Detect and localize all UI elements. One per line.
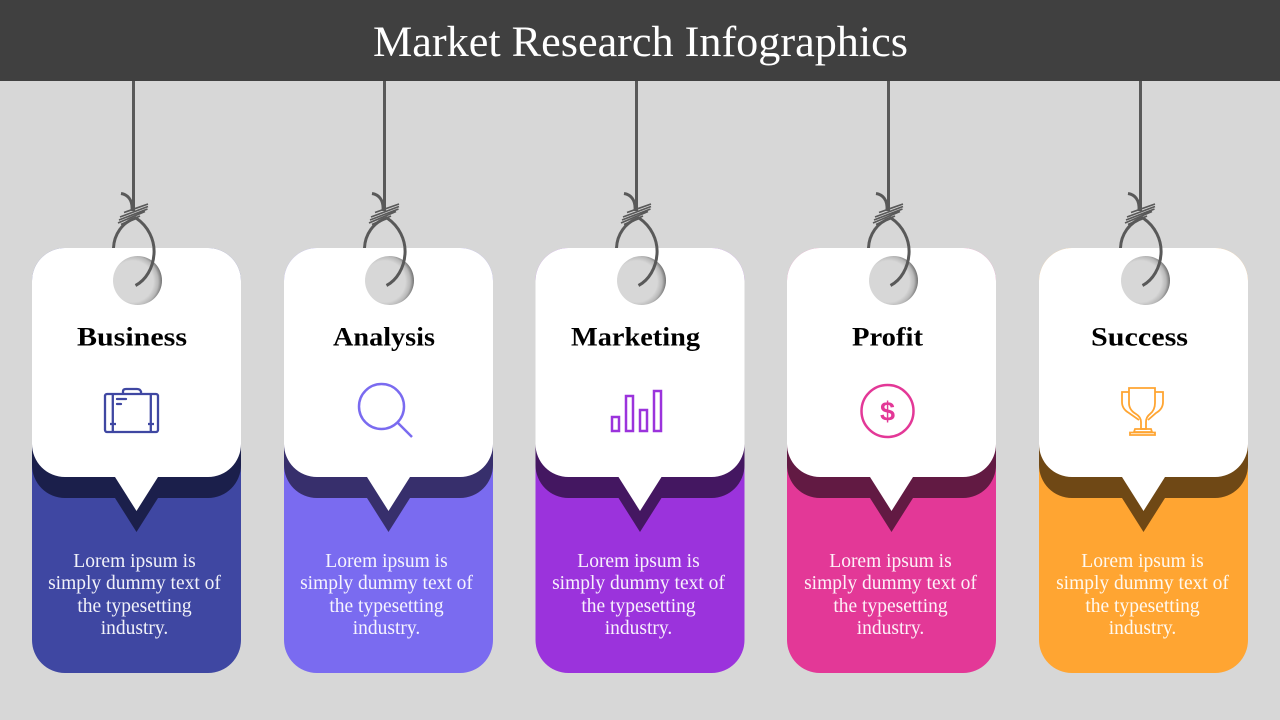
- rope: [616, 81, 657, 286]
- heading: Profit: [852, 322, 923, 352]
- panel: Marketing: industry.: [605, 618, 672, 639]
- panel: Success: [1039, 81, 1248, 673]
- panel: Profit: the typesetting: [833, 596, 948, 617]
- tag coloured base: [32, 248, 241, 673]
- panel: Business: simply dummy text of: [48, 573, 221, 594]
- tag white face: [32, 248, 241, 511]
- panel: Analysis: industry.: [353, 618, 420, 639]
- tag white face: [787, 248, 996, 511]
- icon: trophy: [1122, 388, 1163, 435]
- icon: dollar coin: [862, 385, 914, 437]
- panel: Marketing: [536, 81, 744, 673]
- description: Lorem ipsum is: [829, 551, 952, 572]
- panel: Analysis: simply dummy text of: [300, 573, 473, 594]
- panel: Marketing: simply dummy text of: [552, 573, 725, 594]
- tag white face: [536, 248, 744, 511]
- tag shadow: [32, 269, 241, 532]
- description: Lorem ipsum is: [73, 551, 196, 572]
- tag coloured base: [787, 248, 996, 673]
- rope: [1120, 81, 1161, 286]
- heading: Analysis: [333, 322, 435, 352]
- icon: magnifier: [359, 384, 412, 437]
- panel: Profit: simply dummy text of: [804, 573, 977, 594]
- panel: Profit: industry.: [857, 618, 924, 639]
- panel: Success: industry.: [1109, 618, 1176, 639]
- tag shadow: [284, 269, 493, 532]
- title bar: [0, 0, 1280, 81]
- tag coloured base: [284, 248, 493, 673]
- tag white face: [1039, 248, 1248, 511]
- tag shadow: [536, 269, 744, 532]
- tag white face: [284, 248, 493, 511]
- panel: Business: the typesetting: [77, 596, 192, 617]
- panel: Marketing: the typesetting: [581, 596, 696, 617]
- hole: [113, 256, 162, 305]
- panel: Business: industry.: [101, 618, 168, 639]
- hole: [869, 256, 918, 305]
- hole: [365, 256, 414, 305]
- rope: [364, 81, 405, 286]
- hole: [1121, 256, 1170, 305]
- icon: dollar coin: $: [880, 396, 895, 426]
- panel: Analysis: [284, 81, 493, 673]
- icon: bar chart: [612, 391, 661, 431]
- description: Lorem ipsum is: [1081, 551, 1204, 572]
- heading: Marketing: [571, 322, 700, 352]
- panel: Analysis: the typesetting: [329, 596, 444, 617]
- panel: Profit: [787, 81, 996, 673]
- panel: Business: [32, 81, 241, 673]
- hole: [617, 256, 666, 305]
- heading: Success: [1091, 322, 1188, 352]
- description: Lorem ipsum is: [577, 551, 700, 572]
- panel: Success: the typesetting: [1085, 596, 1200, 617]
- tag shadow: [787, 269, 996, 532]
- rope: [868, 81, 909, 286]
- rope: [114, 81, 154, 286]
- tag shadow: [1039, 269, 1248, 532]
- panel: Success: simply dummy text of: [1056, 573, 1229, 594]
- tag coloured base: [536, 248, 744, 673]
- tag coloured base: [1039, 248, 1248, 673]
- description: Lorem ipsum is: [325, 551, 448, 572]
- icon: briefcase: [105, 389, 158, 432]
- heading: Business: [77, 322, 187, 352]
- title: Market Research Infographics: [373, 19, 908, 66]
